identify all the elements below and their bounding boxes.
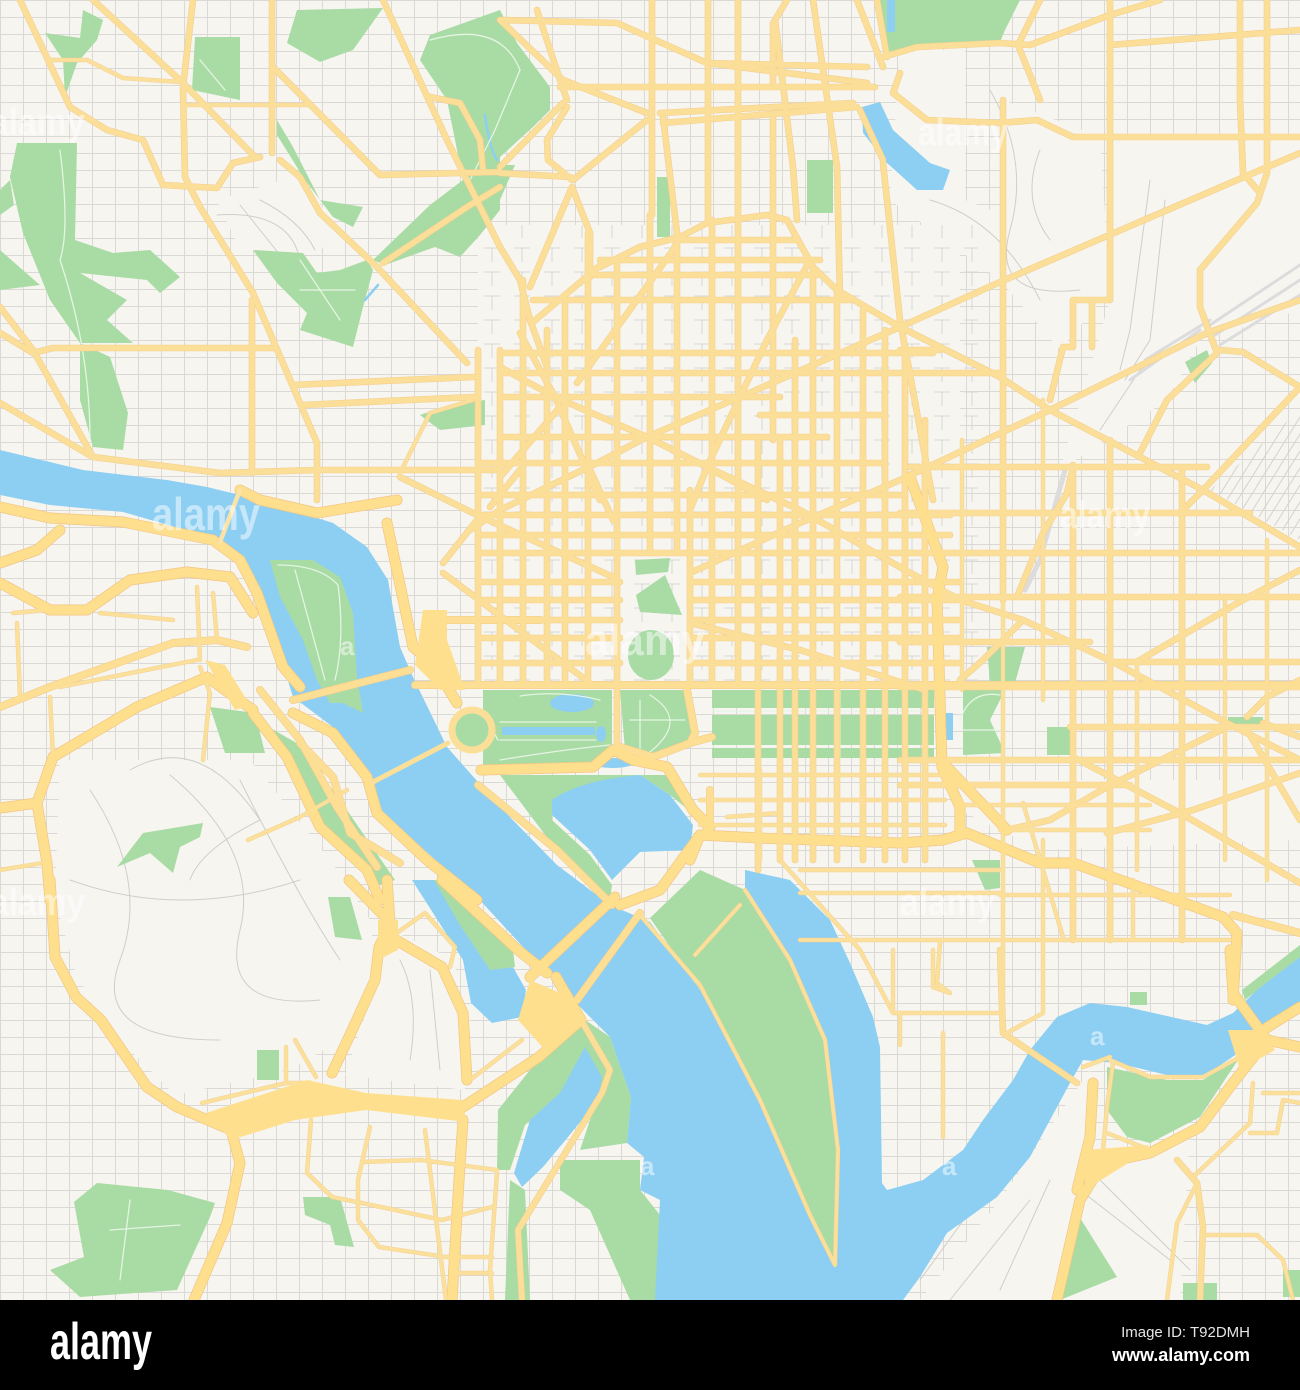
watermark letter: a xyxy=(1090,1021,1105,1051)
park: Arlington hill xyxy=(117,823,203,873)
diagonal streets south-east corner xyxy=(1210,410,1300,540)
park: airport strips xyxy=(505,1180,530,1300)
park: White House xyxy=(636,575,682,615)
park: southwest xyxy=(50,1183,215,1297)
park: Ellipse section xyxy=(620,690,695,755)
park: cemetery corner xyxy=(328,897,362,940)
water: Capitol reflecting pool xyxy=(943,713,953,740)
park: Glover south xyxy=(253,250,373,347)
park: southeast block xyxy=(1062,1220,1117,1299)
park: Lady Bird xyxy=(434,880,515,970)
downtown fine streets xyxy=(478,225,978,685)
watermark letter: a xyxy=(942,1151,957,1181)
water: boundary channel xyxy=(412,880,526,1023)
interchange: Bridge end xyxy=(1228,1030,1275,1070)
park: Rock Creek main xyxy=(373,10,550,265)
park: Mall west xyxy=(483,690,612,770)
park: Rock Creek strip xyxy=(277,120,363,227)
watermark text: alamy xyxy=(900,882,995,924)
interchange: Kennedy Center xyxy=(415,610,465,690)
watermark letter: a xyxy=(640,1151,655,1181)
interchange: Lincoln Memorial circle xyxy=(452,710,492,750)
park: narrow north xyxy=(657,177,670,237)
water: Reflecting Pool xyxy=(502,727,595,735)
watermark text: alamy xyxy=(1060,495,1150,537)
park: Ellipse xyxy=(628,630,674,680)
park: Anacostia xyxy=(1107,1057,1240,1143)
water: Constitution Gardens pond xyxy=(550,694,594,712)
watermarks xyxy=(0,102,1150,1181)
park: Lincoln Park xyxy=(1228,717,1263,724)
water: Roaches Run lagoon xyxy=(514,1047,602,1187)
cemetery and sparse curving lanes xyxy=(70,90,1200,1300)
park: Capitol east square xyxy=(1047,727,1070,755)
water: Dalecarlia top lake xyxy=(887,0,895,32)
bridge: Memorial xyxy=(373,743,448,782)
park: Soldiers block xyxy=(807,160,833,213)
park: Mall east lower xyxy=(712,748,934,758)
park: northwest narrow xyxy=(45,10,103,97)
interchange: Suitland xyxy=(1085,1145,1150,1190)
park paths xyxy=(60,34,1003,1280)
river: Potomac and Anacostia xyxy=(0,450,1300,1300)
park: Mall east upper xyxy=(712,690,934,708)
interchanges xyxy=(205,610,1275,1190)
water: McMillan Reservoir xyxy=(862,102,950,190)
park: Rock Creek lower xyxy=(500,165,515,200)
park: Wisconsin north xyxy=(287,8,383,62)
park: northwest square xyxy=(192,37,240,100)
interchange: Arlington Ridge xyxy=(378,920,398,960)
rail corridor xyxy=(1025,470,1065,590)
water: Tidal Basin xyxy=(552,775,693,880)
watermark text: alamy xyxy=(585,616,706,665)
park: west edge small xyxy=(0,180,14,215)
rail yard xyxy=(1130,265,1300,380)
watermark text: alamy xyxy=(152,488,260,540)
interchange: Pentagon xyxy=(518,980,582,1050)
park: East Potomac xyxy=(650,870,838,1265)
footer logo: alamy xyxy=(50,1313,152,1371)
park: Roosevelt Island xyxy=(270,560,363,713)
website: www.alamy.com xyxy=(1111,1345,1250,1365)
interchange: I-395 south xyxy=(206,1080,466,1140)
image id: Image ID: T92DMH xyxy=(1121,1324,1250,1341)
islands xyxy=(270,560,515,970)
park: top right xyxy=(877,0,1020,55)
park: Anacostia north sliver xyxy=(1242,945,1300,1000)
park: Stanton xyxy=(987,647,1025,683)
water: Kutz pond xyxy=(593,758,633,768)
park: Battery Kemble and Glover Archbold xyxy=(10,143,180,450)
park: Capitol grounds xyxy=(963,690,1005,755)
park: waterside block xyxy=(1130,992,1147,1005)
park: George Washington Parkway strips xyxy=(265,725,395,885)
watermark text: alamy xyxy=(918,112,1008,154)
footer bar xyxy=(0,1300,1300,1390)
park: east small xyxy=(1185,350,1212,383)
watermark letter: a xyxy=(340,631,355,661)
interchange: Rosslyn xyxy=(205,660,250,710)
park: West Potomac xyxy=(500,775,640,900)
bridge over Potomac at Key xyxy=(220,490,240,542)
water: creek xyxy=(365,115,497,300)
park: Mall east middle xyxy=(712,715,934,745)
